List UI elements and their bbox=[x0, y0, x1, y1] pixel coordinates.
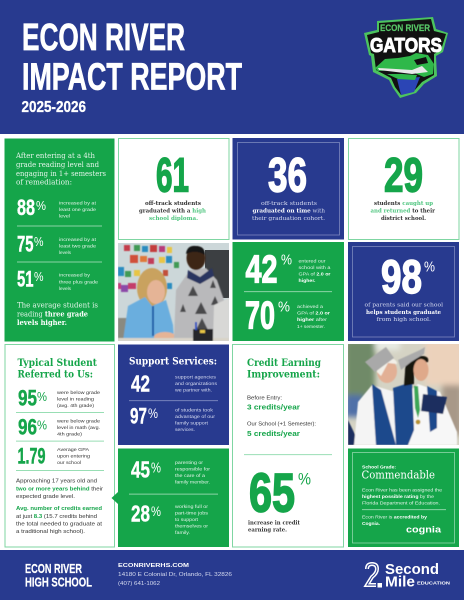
heading: Typical Student bbox=[18, 357, 97, 369]
closing text bbox=[17, 300, 98, 327]
panel: 98 percent of parents bbox=[348, 242, 459, 341]
panel: GPA stats bbox=[232, 242, 344, 341]
stat: 65%: 65 bbox=[249, 462, 295, 524]
photo: teacher and student at laptop bbox=[118, 243, 229, 342]
logo: Second Mile Education: Mile bbox=[385, 574, 415, 591]
stat: 70%: % bbox=[278, 300, 290, 316]
stat: 75%: % bbox=[34, 235, 44, 249]
intro text: After entering at a 4th bbox=[15, 151, 95, 160]
stat: 70%: achieved a bbox=[297, 304, 324, 309]
student hoodie bbox=[174, 268, 224, 338]
panel: credit earning bbox=[232, 344, 344, 547]
caption: students caught up bbox=[374, 201, 433, 207]
logo: Cognia: cognia bbox=[406, 525, 442, 535]
our school: 5 credits/year bbox=[247, 429, 300, 438]
stat: 97%: family support bbox=[175, 420, 209, 426]
stat: 1.79 GPA: our school bbox=[57, 460, 81, 465]
intro text: engaging in 1+ semesters bbox=[16, 169, 106, 178]
stat: 96%: were below grade bbox=[57, 418, 101, 424]
accreditation text: Econ River is accredited by bbox=[362, 514, 428, 519]
stat: 96%: 96 bbox=[18, 415, 37, 440]
stat: 42 agencies: and organizations bbox=[175, 381, 218, 386]
right graduate cap bbox=[398, 347, 425, 370]
logo: Second Mile Education bbox=[367, 561, 450, 591]
laptop and pen cup bbox=[213, 298, 229, 341]
heading: Support Services: bbox=[129, 356, 217, 368]
rating text: Econ River has been assigned the bbox=[362, 487, 443, 492]
heading bbox=[18, 357, 97, 380]
stat: 42%: % bbox=[281, 253, 292, 269]
stat: 95%: were below grade bbox=[57, 390, 101, 395]
accreditation text bbox=[362, 514, 428, 526]
teacher hair bbox=[137, 268, 167, 308]
caption bbox=[364, 302, 443, 323]
stat: 75% bbox=[17, 232, 97, 256]
stat: 28%: % bbox=[151, 503, 161, 519]
stat: 95%: level in reading bbox=[57, 396, 95, 402]
gator teeth bbox=[378, 66, 428, 74]
rating text: highest possible rating by the bbox=[362, 494, 435, 499]
medal ribbon bbox=[414, 386, 420, 418]
stat: 88%: increased by at bbox=[59, 200, 97, 206]
stat: 70% bbox=[245, 294, 330, 338]
arrow: callout pointer bbox=[112, 492, 118, 504]
caption: off-track students bbox=[261, 201, 317, 207]
logo: Second Mile Education: Second bbox=[385, 561, 439, 578]
stat: 42 agencies: 42 bbox=[131, 371, 150, 397]
caption bbox=[139, 201, 207, 222]
caption: from high school. bbox=[376, 317, 431, 323]
title: ECON RIVER bbox=[22, 17, 185, 59]
panel: 98 percent of parents: % bbox=[424, 259, 435, 276]
stat: 45%: family member. bbox=[175, 480, 210, 484]
school name: HIGH SCHOOL bbox=[25, 575, 92, 590]
stat: 51%: levels bbox=[59, 286, 72, 291]
stat: 65%: % bbox=[298, 469, 311, 488]
stat: 88%: least one grade bbox=[59, 207, 97, 212]
stat: 51%: increased by bbox=[59, 272, 91, 278]
stat: 75%: levels bbox=[59, 250, 72, 255]
stat: 88%: % bbox=[36, 199, 46, 213]
footer band bbox=[0, 550, 464, 600]
stat: 70%: 1+ semester. bbox=[297, 324, 325, 329]
stat: 96%: 4th grade) bbox=[57, 432, 83, 436]
panel: 61 graduates: 61 bbox=[156, 150, 189, 202]
age and grade text bbox=[16, 479, 103, 500]
stat: 42%: school with a bbox=[298, 265, 331, 270]
stat: 97% bbox=[130, 404, 216, 432]
logo: Econ River Gators: GATORS bbox=[370, 35, 442, 57]
stat: 95% bbox=[18, 386, 101, 411]
year: 2025-2026 bbox=[22, 99, 86, 116]
gator neck bbox=[397, 77, 420, 95]
stat: 28%: working full or bbox=[175, 504, 209, 509]
stat: 28%: 28 bbox=[131, 501, 150, 527]
intro text: grade reading level and bbox=[16, 160, 99, 169]
left graduate cap bbox=[365, 347, 394, 372]
stat: 28%: part-time jobs bbox=[175, 510, 209, 516]
age and grade text: expected grade level. bbox=[16, 494, 75, 500]
stat: 42%: entered our bbox=[298, 258, 326, 264]
caption bbox=[370, 201, 436, 222]
stat: 45%: the care of a bbox=[175, 473, 206, 478]
stat: 45%: % bbox=[151, 461, 161, 477]
stat: 42 agencies: support agencies bbox=[175, 374, 217, 380]
diploma bbox=[421, 394, 447, 414]
stat: 51%: 51 bbox=[17, 266, 34, 292]
intro text bbox=[15, 151, 106, 186]
logo: Second Mile Education: EDUCATION bbox=[417, 580, 450, 586]
intro text: of remediation: bbox=[16, 178, 72, 186]
caption: their graduation cohort. bbox=[252, 216, 325, 222]
closing text: reading three grade bbox=[17, 310, 88, 318]
accreditation text: Cognia. bbox=[362, 521, 380, 526]
credits text: the total needed to graduate at bbox=[16, 522, 102, 528]
stat: 95%: % bbox=[37, 389, 47, 404]
heading bbox=[247, 357, 322, 380]
panel: support services bbox=[118, 344, 229, 445]
heading: Improvement: bbox=[247, 368, 320, 380]
rating text: Florida Department of Education. bbox=[362, 500, 440, 506]
contact details bbox=[118, 563, 232, 587]
stat: 96%: level in math (avg. bbox=[57, 425, 100, 430]
teacher shirt bbox=[123, 297, 174, 341]
panel: reading growth bbox=[4, 138, 114, 342]
stat: 65%: increase in credit bbox=[248, 520, 300, 526]
our school: Our School (+1 Semester): bbox=[247, 422, 316, 428]
gator eye bbox=[414, 57, 428, 65]
stat: 28% bbox=[131, 501, 209, 535]
contact details: 14180 E Colonial Dr, Orlando, FL 32826 bbox=[118, 572, 232, 578]
stat: 97%: services. bbox=[175, 427, 195, 432]
stat: 28%: family. bbox=[175, 530, 190, 535]
left graduate gown bbox=[354, 385, 400, 445]
stat: 45%: parenting or bbox=[175, 460, 204, 465]
panel: typical student bbox=[5, 344, 114, 547]
stat: 42%: 42 bbox=[246, 248, 278, 292]
grade heading: School Grade: bbox=[362, 464, 397, 469]
stat: 51%: % bbox=[34, 270, 44, 284]
right graduate head bbox=[404, 356, 428, 386]
before entry bbox=[247, 396, 300, 412]
stat: 1.79 GPA: Average GPA bbox=[57, 447, 89, 452]
stat: 1.79 GPA bbox=[18, 444, 91, 468]
school name: ECON RIVER bbox=[25, 561, 82, 576]
right graduate gown bbox=[407, 384, 458, 445]
stat: 45% bbox=[131, 457, 211, 484]
panel: school grade bbox=[348, 448, 459, 547]
caption: and returned to their bbox=[370, 208, 436, 214]
caption: of parents said our school bbox=[364, 302, 443, 308]
closing text: The average student is bbox=[17, 300, 98, 310]
stat: 42 agencies bbox=[131, 371, 218, 397]
panel: 29 returned bbox=[348, 138, 459, 240]
stat: 97%: advantage of our bbox=[175, 414, 216, 419]
stat: 97%: 97 bbox=[130, 404, 147, 429]
credits text: Avg. number of credits earned bbox=[16, 506, 103, 512]
stat: 97%: of students took bbox=[175, 408, 214, 412]
age and grade text: two or more years behind their bbox=[16, 486, 103, 492]
caption: off-track students bbox=[145, 201, 202, 207]
panel: 29 returned: 29 bbox=[384, 150, 423, 202]
stat: 70%: GPA of 2.0 or bbox=[297, 310, 330, 316]
stat: 75%: least two grade bbox=[59, 244, 97, 248]
stat: 88% bbox=[17, 195, 97, 220]
stat: 45%: responsible for bbox=[175, 466, 211, 472]
shelf shadow bbox=[118, 318, 127, 338]
caption: school diploma. bbox=[149, 216, 198, 222]
stat: 88%: level bbox=[59, 214, 70, 218]
stat: 45%: 45 bbox=[131, 457, 150, 483]
stat: 95%: 95 bbox=[18, 386, 37, 411]
grade heading: Commendable bbox=[362, 468, 435, 482]
rating text bbox=[362, 487, 443, 506]
stat: 42 agencies: we partner with. bbox=[175, 388, 212, 392]
closing text: levels higher. bbox=[17, 318, 67, 327]
logo: Econ River Gators: ECON RIVER bbox=[380, 23, 430, 34]
panel: 61 graduates bbox=[118, 138, 229, 240]
stat: 95%: (avg. 4th grade) bbox=[57, 403, 95, 408]
stat: 65%: earning rate. bbox=[248, 528, 287, 534]
stat: 88%: 88 bbox=[17, 195, 35, 220]
stat: 97%: % bbox=[148, 406, 158, 421]
panel: 98 percent of parents: 98 bbox=[381, 250, 422, 303]
title bbox=[22, 17, 242, 98]
before entry: 3 credits/year bbox=[247, 402, 300, 412]
logo: Econ River Gators bbox=[364, 17, 448, 98]
caption: graduated with a high bbox=[139, 208, 207, 214]
school name bbox=[25, 561, 92, 590]
title: IMPACT REPORT bbox=[22, 56, 242, 98]
stat: 51%: three plus grade bbox=[59, 280, 99, 284]
stat: 96% bbox=[18, 415, 101, 440]
heading: Referred to Us: bbox=[18, 368, 93, 380]
photo: graduates bbox=[345, 340, 463, 445]
stat: 96%: % bbox=[37, 417, 47, 432]
left dark foreground bbox=[348, 420, 356, 445]
age and grade text: Approaching 17 years old and bbox=[16, 479, 97, 485]
before entry: Before Entry: bbox=[247, 396, 282, 402]
caption: district school. bbox=[381, 216, 426, 222]
student head bbox=[186, 251, 206, 270]
stat: 28%: to support bbox=[175, 517, 199, 522]
panel: 36 on time bbox=[232, 138, 344, 240]
heading: Credit Earning bbox=[247, 357, 322, 369]
header band bbox=[0, 0, 464, 134]
contact details: ECONRIVERHS.COM bbox=[118, 563, 189, 569]
caption: helps students graduate bbox=[366, 310, 441, 316]
contact details: (407) 641-1062 bbox=[118, 581, 160, 587]
stat: 42%: GPA of 2.0 or bbox=[298, 272, 331, 276]
credits text bbox=[16, 506, 103, 535]
gator head bbox=[375, 53, 434, 77]
stat: 1.79 GPA: 1.79 bbox=[18, 444, 46, 468]
stat: 28%: themselves or bbox=[175, 524, 209, 528]
left graduate head bbox=[377, 359, 397, 383]
stat: 42%: higher. bbox=[298, 278, 316, 283]
gator jaw bbox=[387, 74, 417, 80]
panel: 36 on time: 36 bbox=[268, 150, 307, 202]
stat: 75%: 75 bbox=[17, 232, 34, 256]
panel: family responsibilities bbox=[112, 448, 229, 547]
caption: graduated on time with bbox=[252, 208, 325, 214]
stat: 75%: increased by at bbox=[59, 237, 97, 242]
stat: 42% bbox=[246, 248, 331, 292]
teacher face bbox=[147, 280, 165, 304]
stat: 51% bbox=[17, 266, 99, 292]
stat: 70%: higher after bbox=[297, 317, 328, 322]
credits text: a traditional high school). bbox=[16, 529, 85, 535]
stat: 1.79 GPA: upon entering bbox=[57, 454, 91, 458]
caption bbox=[252, 201, 325, 222]
stat: 70%: 70 bbox=[245, 294, 275, 338]
credits text: at just 8.3 (15.7 credits behind bbox=[16, 514, 97, 520]
our school bbox=[247, 422, 316, 438]
